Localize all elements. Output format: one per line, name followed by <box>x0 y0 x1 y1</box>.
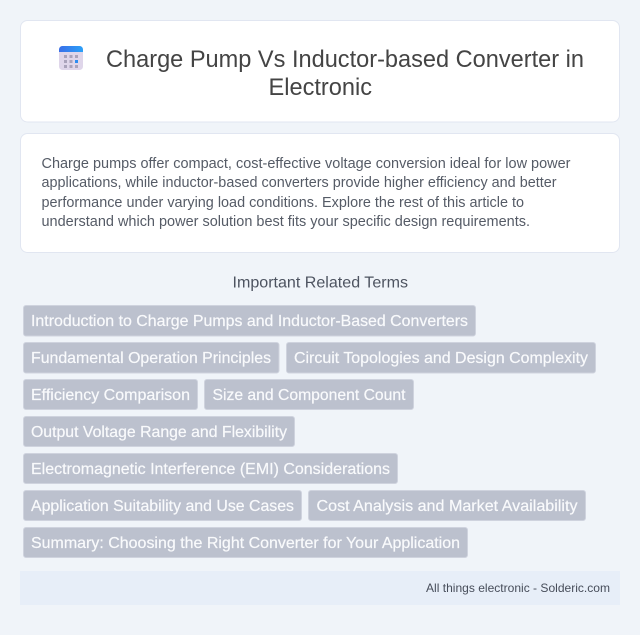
tag: introduction <box>24 306 476 336</box>
tag: fundamentals <box>24 342 279 373</box>
tag: summary: Summary: Choosing the Right Converter for Your Application <box>31 535 460 552</box>
description text: Charge pumps offer compact, cost-effective voltage conversion ideal for low power <box>42 156 571 172</box>
tag: cost: Cost Analysis and Market Availability <box>316 498 578 515</box>
tag: introduction: Introduction to Charge Pumps and Inductor-Based Converters <box>31 313 468 330</box>
tag: topologies <box>286 342 596 373</box>
title: Electronic <box>268 74 372 101</box>
tag: applications: Application Suitability and Use Cases <box>31 498 294 515</box>
description text: applications, while inductor-based converters provide higher efficiency and better <box>42 175 557 191</box>
tag: applications <box>24 490 302 520</box>
tag: fundamentals: Fundamental Operation Principles <box>31 350 271 367</box>
tag: topologies: Circuit Topologies and Design Complexity <box>294 350 588 367</box>
panel: description card <box>20 134 620 252</box>
footer <box>20 571 620 605</box>
tag: efficiency: Efficiency Comparison <box>31 387 190 404</box>
tag: output voltage <box>24 416 294 446</box>
icon: calendar grid <box>59 46 83 70</box>
panel: title card <box>20 20 620 122</box>
description text <box>42 156 571 230</box>
footer: All things electronic - Solderic.com <box>426 581 610 595</box>
heading: important related terms: Important Related Terms <box>232 274 408 292</box>
tag: emi <box>24 454 398 484</box>
tag: efficiency <box>24 380 198 410</box>
title <box>106 46 584 101</box>
tag: summary <box>24 528 468 558</box>
tag: output voltage: Output Voltage Range and Flexibility <box>31 424 287 441</box>
description text: understand which power solution best fits your specific design requirements. <box>42 214 530 230</box>
title: Charge Pump Vs Inductor-based Converter in <box>106 46 584 73</box>
description text: performance under varying load conditions. Explore the rest of this article to <box>42 195 524 211</box>
tag list <box>24 306 596 558</box>
tag: size: Size and Component Count <box>212 387 406 404</box>
tag: size <box>204 380 414 410</box>
tag: emi: Electromagnetic Interference (EMI) Considerations <box>31 461 390 478</box>
tag: cost <box>308 490 586 520</box>
